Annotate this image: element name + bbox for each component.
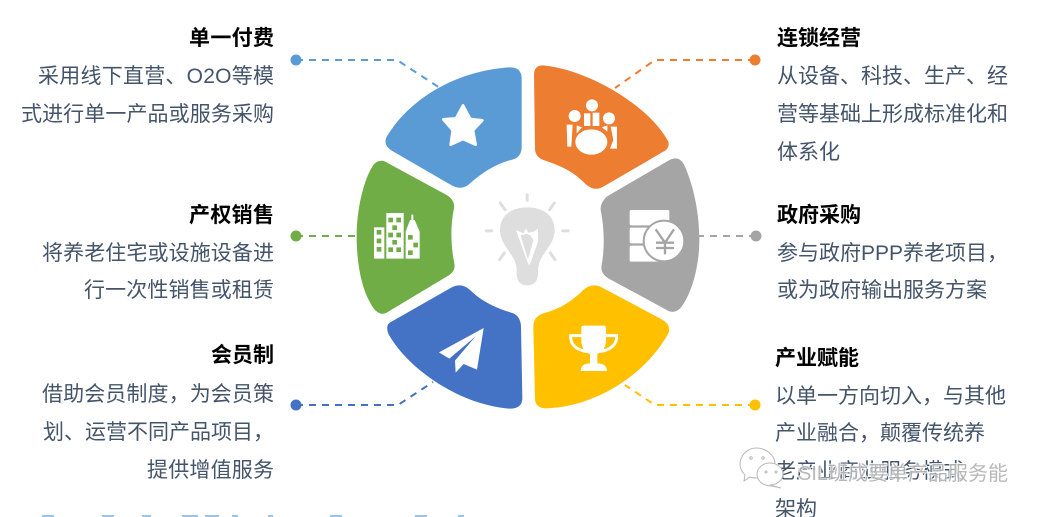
text: 会员制: 会员制 [211,344,274,367]
connector: top left [290,54,440,88]
text: 产业赋能: 产业赋能 [775,347,859,370]
segment: star [385,67,522,188]
text: 政府采购: 参与政府PPP养老项目， [777,242,1008,265]
connector: top right [615,54,760,88]
connector: bottom right [625,385,760,410]
segment: trophy [533,285,669,408]
text: 连锁经营: 营等基础上形成标准化和 [777,103,1008,126]
text: 产权销售: 将养老住宅或设施设备进 [42,242,274,265]
text: 产业赋能: 老产业商业服务模式 [775,460,964,483]
icon: paper plane [439,328,484,373]
icon: wechat logo [740,448,783,488]
text: 产权销售: 行一次性销售或租赁 [84,279,274,302]
watermark: SIL班成要单产品服务能 [798,462,1008,485]
text: 产业赋能: 以单一方向切入，与其他 [775,385,1006,408]
text: 政府采购: 政府采购 [777,203,861,227]
text: 政府采购 [777,203,1008,302]
watermark [740,448,1008,488]
text: 连锁经营: 从设备、科技、生产、经 [777,65,1008,88]
text: 连锁经营 [777,27,1008,164]
connector: bottom left [290,382,433,410]
text: 会员制: 借助会员制度，为会员策 [42,383,274,406]
icon: meeting table [567,99,617,155]
text: 单一付费: 单一付费 [189,27,274,50]
text: 政府采购: 或为政府输出服务方案 [777,279,987,302]
segment: paper plane [387,285,522,409]
icon: yen coin stack [630,210,684,262]
icon: star [443,105,482,145]
wheel diagram [357,65,699,409]
icon: trophy [571,326,617,371]
text: 会员制: 划、运营不同产品项目， [43,421,274,444]
text: 产权销售 [42,204,274,302]
text: 会员制: 提供增值服务 [147,459,274,482]
connector: middle right [698,230,762,242]
connector: middle left [290,230,357,242]
segment: yen [601,158,699,312]
text: 产业赋能: 产业融合，颠覆传统养 [775,422,985,445]
text: 连锁经营: 连锁经营 [777,27,861,50]
text: 会员制 [42,344,274,482]
segment: buildings [357,161,455,314]
watermark: SIL班成要单产品服务能 [798,462,1008,485]
clipped text line at bottom edge [42,515,464,517]
text: 单一付费: 式进行单一产品或服务采购 [21,103,274,126]
text: 产业赋能 [775,347,1006,517]
text: 连锁经营: 体系化 [777,141,840,164]
text: 单一付费 [21,27,274,126]
segment: people [534,65,669,189]
text: 单一付费: 采用线下直营、O2O等模 [38,65,274,88]
icon: light bulb [485,193,570,285]
text: 产权销售: 产权销售 [189,204,274,227]
icon: buildings [374,213,420,259]
